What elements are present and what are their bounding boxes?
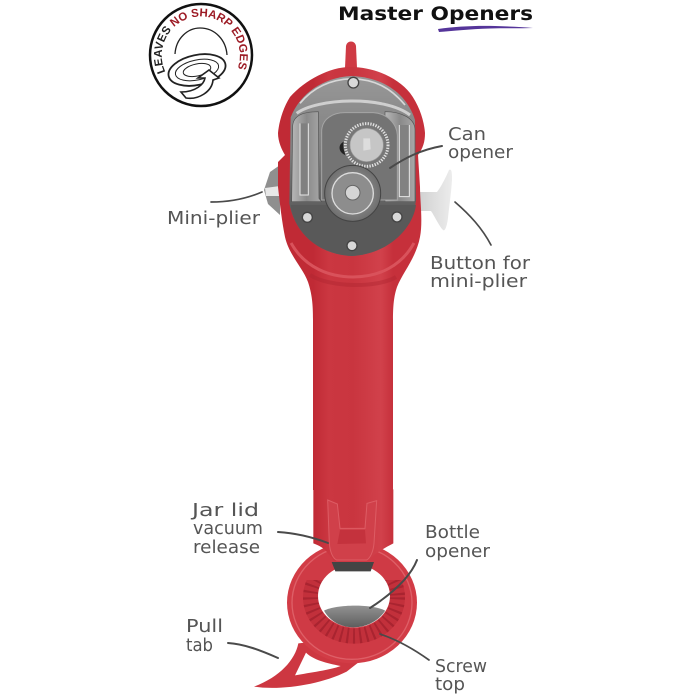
leader line xyxy=(380,634,429,660)
lower plate dark xyxy=(291,205,416,256)
label: can opener: Can xyxy=(448,124,486,145)
mini-plier xyxy=(264,165,280,215)
leader line xyxy=(278,532,328,543)
pull tab xyxy=(254,640,370,688)
label: can opener xyxy=(390,124,514,168)
can opener body xyxy=(278,42,425,490)
lower wheel xyxy=(325,165,381,221)
label: jar lid vacuum release: Jar lid xyxy=(191,500,259,521)
label: bottle opener: Bottle xyxy=(425,522,480,543)
rivets xyxy=(302,77,402,251)
label: screw top: Screw xyxy=(435,656,487,677)
text line: opener xyxy=(448,142,514,163)
metal plate group xyxy=(289,76,416,256)
label: pull tab: Pull xyxy=(186,616,223,637)
text line: vacuum xyxy=(193,518,263,539)
text line: opener xyxy=(425,541,491,562)
leader line xyxy=(228,643,278,658)
cutting gear xyxy=(340,142,345,155)
button for mini-plier xyxy=(420,170,452,230)
icon: can lid with arrow xyxy=(166,28,228,98)
title xyxy=(338,4,533,32)
text line: mini-plier xyxy=(430,271,528,292)
label: screw top xyxy=(380,634,487,695)
label: mini-plier: Mini-plier xyxy=(167,208,261,229)
plate rim xyxy=(300,79,405,105)
label: jar lid vacuum release xyxy=(191,500,328,558)
handle neck xyxy=(313,489,393,561)
badge text: LEAVES NO SHARP EDGES xyxy=(154,8,248,74)
text line: tab xyxy=(186,635,213,656)
leader line xyxy=(390,146,442,168)
leader line xyxy=(455,202,491,245)
pull tab tip xyxy=(345,42,357,68)
purple underline xyxy=(438,26,533,32)
leader line xyxy=(211,192,262,202)
infographic canvas xyxy=(148,2,532,694)
centre panel xyxy=(322,113,397,200)
opening xyxy=(318,565,390,627)
right channel xyxy=(385,112,415,202)
text line: release xyxy=(193,537,260,558)
text line: top xyxy=(435,674,465,695)
label: button for mini-plier: Button for xyxy=(430,253,531,274)
ring xyxy=(287,542,417,663)
label: bottle opener xyxy=(370,522,491,608)
ring tool: bottle opener and screw top xyxy=(254,489,417,688)
badge: leaves no sharp edges xyxy=(148,2,254,108)
title: Master Openers xyxy=(338,4,533,25)
label: mini-plier xyxy=(167,192,262,229)
left channel xyxy=(292,112,322,202)
red head and handle xyxy=(278,67,425,490)
jar lid vacuum release xyxy=(328,500,377,560)
ribs xyxy=(311,559,397,636)
label: pull tab xyxy=(186,616,278,658)
metal bottle opener tooth xyxy=(332,562,374,571)
leader line xyxy=(370,560,417,608)
grey screw-top crescent xyxy=(324,606,385,627)
label: button for mini-plier xyxy=(430,202,531,292)
shoulder highlight xyxy=(291,243,414,277)
